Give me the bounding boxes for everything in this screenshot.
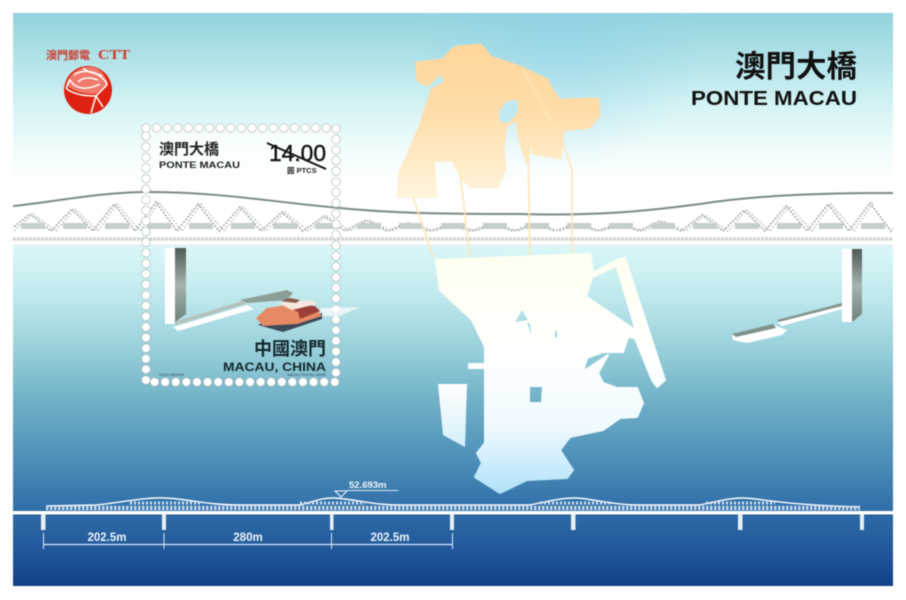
top chord xyxy=(13,192,893,215)
piers xyxy=(41,514,864,530)
title xyxy=(691,50,857,110)
mini truss xyxy=(46,498,860,508)
span labels: 202.5m xyxy=(370,532,410,544)
deck xyxy=(13,511,893,514)
span labels: 202.5m xyxy=(87,532,127,544)
left bridge pier xyxy=(165,248,186,324)
lower chord xyxy=(13,223,893,229)
stamp heading: PONTE MACAU xyxy=(159,160,240,171)
right bridge pier xyxy=(842,249,862,322)
height marker: 52.693m xyxy=(349,480,387,491)
stamp country name: MACAU, CHINA xyxy=(223,360,326,374)
stamp country name: MACAU POSTAL ISSUE xyxy=(287,373,327,377)
stamp country name: 中國澳門 xyxy=(254,339,326,359)
span labels: 280m xyxy=(233,532,263,544)
dimension lines xyxy=(43,533,453,549)
stamp perforations xyxy=(146,128,336,382)
ferry wake left xyxy=(173,290,360,331)
height marker xyxy=(335,480,398,497)
CTT logo xyxy=(46,48,131,114)
stamp heading xyxy=(159,140,240,171)
peninsula xyxy=(398,45,599,197)
icon: lotus emblem xyxy=(64,66,112,114)
map ponds xyxy=(515,310,557,402)
stamp interior highlight xyxy=(146,128,336,198)
taipa and coloane xyxy=(436,254,665,493)
CTT logo: CTT xyxy=(98,48,131,63)
stamp value: 圓 PTCS xyxy=(287,166,317,175)
span labels xyxy=(87,532,410,544)
reservoir between causeways xyxy=(587,267,634,328)
elevation diagram xyxy=(13,480,893,549)
artificial island xyxy=(438,384,467,447)
bridge truss elevation xyxy=(9,192,900,245)
map of Macau xyxy=(398,45,665,493)
CTT logo: 澳門郵電 xyxy=(46,48,90,62)
stamp country name xyxy=(159,339,327,377)
right boat and wake xyxy=(732,303,842,343)
peninsula streaks xyxy=(413,70,572,257)
truss lattice xyxy=(9,202,900,231)
ferry xyxy=(256,298,322,332)
stamp heading: 澳門大橋 xyxy=(159,140,219,158)
stamp value: 14.00 xyxy=(269,140,326,166)
map lake xyxy=(499,100,518,123)
stamp country name: ©2010 DESIGN xyxy=(159,373,184,377)
title: PONTE MACAU xyxy=(691,88,857,110)
title: 澳門大橋 xyxy=(735,50,857,84)
